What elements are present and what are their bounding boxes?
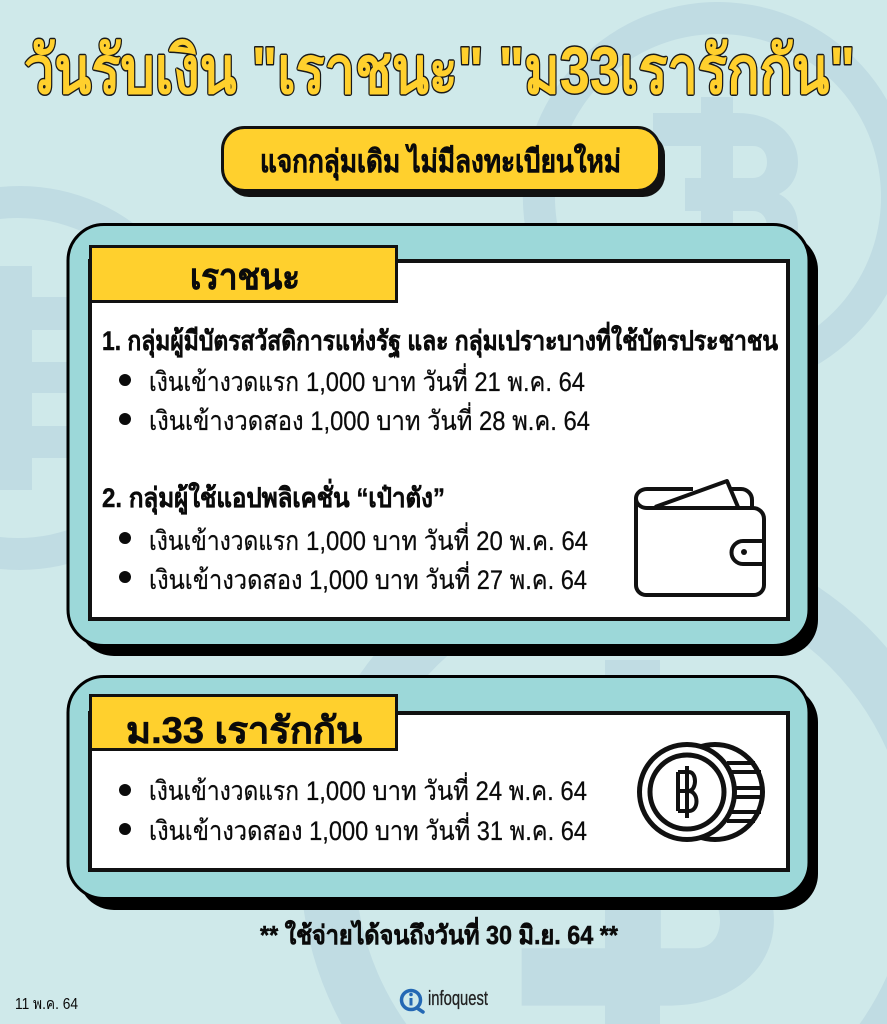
logo: infoquest: infoquest (428, 988, 488, 1010)
panel heading: เราชนะ (90, 246, 396, 302)
watermark: baht coin bottom right (304, 587, 887, 1024)
panel heading: ม.33 เรารักกัน (90, 696, 396, 751)
group 1 list: 1,000 บาท วันที่ 21 พ.ค. 64 (306, 363, 585, 397)
group 2 list (119, 522, 588, 595)
group 2 list: เงินเข้างวดสอง 1,000 บาท วันที่ 27 พ.ค. 64 (149, 561, 587, 595)
panel heading: ม.33 เรารักกัน: ม.33 เรารักกัน (126, 710, 362, 751)
footnote: ** ใช้จ่ายได้จนถึงวันที่ 30 มิ.ย. 64 ** (260, 916, 619, 950)
list: เงินเข้างวดสอง 1,000 บาท วันที่ 31 พ.ค. 64 (149, 812, 587, 846)
group 1 list (119, 363, 590, 436)
subtitle pill (222, 128, 665, 197)
group 1 list: เงินเข้างวดแรก (149, 367, 299, 397)
panel: ม.33 เรารักกัน (68, 676, 818, 910)
logo: infoquest (402, 988, 488, 1012)
icon: wallet (636, 481, 764, 595)
watermark: baht coin top right (523, 2, 887, 364)
list: 1,000 บาท วันที่ 24 พ.ค. 64 (306, 772, 587, 806)
list (119, 772, 587, 846)
group 2 list: 1,000 บาท วันที่ 20 พ.ค. 64 (306, 522, 588, 556)
group 2 heading: 2. กลุ่มผู้ใช้แอปพลิเคชั่น “เป๋าตัง” (102, 478, 445, 515)
panel: เราชนะ (68, 224, 818, 656)
subtitle pill: แจกกลุ่มเดิม ไม่มีลงทะเบียนใหม่ (260, 143, 621, 181)
icon: baht coins (640, 744, 764, 840)
group 2 list: เงินเข้างวดแรก (149, 526, 299, 556)
date: 11 พ.ค. 64 (15, 996, 78, 1013)
panel heading: เราชนะ: เราชนะ (190, 256, 300, 297)
watermark: baht coin left (0, 186, 132, 570)
group 1 list: เงินเข้างวดสอง 1,000 บาท วันที่ 28 พ.ค. 64 (149, 402, 590, 436)
group 1 heading: 1. กลุ่มผู้มีบัตรสวัสดิการแห่งรัฐ และ กลุ่มเปราะบางที่ใช้บัตรประชาชน (102, 321, 778, 359)
list: เงินเข้างวดแรก (149, 776, 299, 806)
